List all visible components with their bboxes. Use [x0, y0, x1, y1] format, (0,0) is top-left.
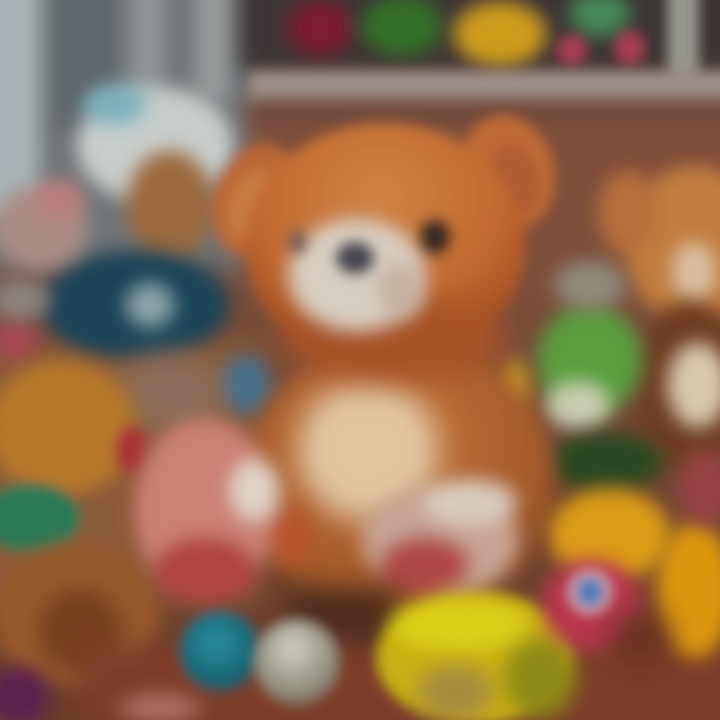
bear head	[245, 123, 525, 367]
bear belly	[298, 380, 438, 520]
bear left ear	[197, 131, 315, 269]
toy: orange bear lower left	[0, 360, 160, 720]
bear nose	[335, 241, 375, 275]
floor	[80, 590, 720, 720]
bear eye	[419, 219, 451, 255]
bear right ear	[449, 104, 567, 240]
toy: green plush	[501, 261, 663, 492]
teddy bear	[135, 104, 567, 620]
toy: white and blue plush on the left	[0, 85, 271, 430]
toy: right background bear	[598, 165, 720, 470]
bear left paw and pink toy	[135, 418, 312, 604]
shelf with colourful toys	[240, 0, 720, 122]
bear muzzle	[289, 219, 425, 331]
toy: white ball	[255, 620, 339, 704]
toy: teal ball	[180, 611, 260, 691]
toy: yellow ring	[377, 592, 576, 720]
toy: yellow and orange balls on the right	[542, 450, 720, 670]
bear right paw	[362, 480, 518, 596]
bear body	[245, 340, 555, 620]
